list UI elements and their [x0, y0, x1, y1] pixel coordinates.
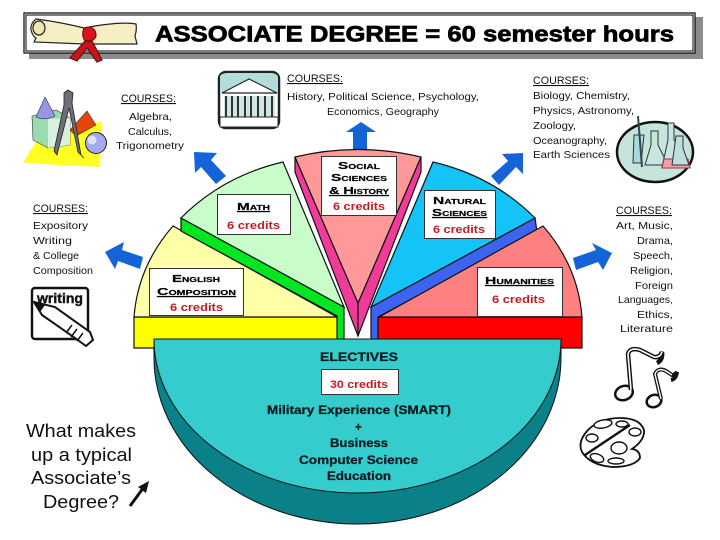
- courses text: math: [116, 93, 185, 152]
- courses text: math: Algebra,: [129, 111, 172, 123]
- question text: Degree?: [43, 491, 119, 512]
- courses text: humanities: Art, Music,: [616, 220, 673, 232]
- icon: writing pencil: writing: [36, 290, 83, 306]
- courses text: social sciences and history: History, Political Science, Psychology,: [287, 91, 479, 103]
- panel: electives half disc: [154, 339, 561, 524]
- panel: natural sciences wedge: [371, 162, 537, 340]
- courses text: natural sciences: Earth Sciences: [533, 149, 610, 161]
- courses text: natural sciences: [533, 75, 634, 161]
- title text: ASSOCIATE DEGREE = 60 semester hours: [155, 22, 674, 46]
- title banner: [24, 13, 703, 59]
- courses text: english composition: Writing: [33, 235, 72, 247]
- arrow: small black pointer: [130, 481, 149, 506]
- courses text: humanities: Ethics,: [637, 309, 673, 321]
- courses text: math: Calculus,: [128, 126, 172, 138]
- panel: english composition label: English: [172, 273, 220, 285]
- panel: natural sciences label: 6 credits: [433, 224, 485, 236]
- arrow: to natural science courses: [491, 153, 523, 185]
- courses text: humanities: Drama,: [637, 235, 673, 247]
- arrow: to humanities courses: [573, 243, 612, 270]
- courses text: humanities: Speech,: [633, 250, 673, 262]
- panel: social sciences label: [322, 156, 396, 216]
- panel: social sciences label: & History: [329, 185, 389, 197]
- electives course list: Computer Science: [299, 455, 418, 467]
- panel: social sciences label: Sciences: [331, 172, 387, 184]
- courses text: natural sciences: Oceanography,: [533, 135, 607, 147]
- courses text: humanities: Literature: [620, 323, 673, 335]
- electives course list: Education: [327, 471, 391, 483]
- courses text: humanities: COURSES:: [616, 205, 672, 217]
- panel: math label: Math: [237, 201, 270, 213]
- arrow: to social science courses: [346, 122, 376, 150]
- arrow: to math courses: [194, 152, 226, 184]
- icon: science flasks: [617, 116, 693, 182]
- question text: Associate’s: [31, 467, 131, 488]
- courses text: natural sciences: Physics, Astronomy,: [533, 105, 634, 117]
- icon: geometry shapes and compass: [23, 90, 106, 167]
- panel: social sciences label: 6 credits: [333, 201, 385, 213]
- courses text: social sciences and history: [287, 73, 479, 118]
- panel: math wedge: [181, 162, 344, 340]
- courses text: humanities: [616, 205, 673, 335]
- courses text: natural sciences: COURSES:: [533, 75, 589, 87]
- courses text: humanities: Foreign: [635, 280, 673, 292]
- electives credits box: [322, 370, 398, 394]
- panel: math label: [218, 194, 290, 234]
- arrow: to english courses: [105, 242, 143, 269]
- courses text: english composition: Expository: [33, 220, 89, 232]
- panel: natural sciences label: [424, 190, 496, 238]
- icon: paint palette: [580, 418, 644, 467]
- question text: up a typical: [31, 444, 132, 465]
- courses text: social sciences and history: Economics, Geography: [327, 106, 440, 118]
- courses text: english composition: [33, 203, 93, 277]
- electives course list: +: [355, 422, 362, 434]
- panel: humanities label: Humanities: [485, 275, 554, 287]
- courses text: english composition: & College: [33, 250, 79, 262]
- electives credits box: 30 credits: [330, 379, 388, 391]
- panel: math label: 6 credits: [227, 220, 280, 232]
- panel: english composition label: 6 credits: [170, 302, 223, 314]
- courses text: natural sciences: Zoology,: [533, 120, 576, 132]
- panel: english composition wedge: [134, 226, 338, 348]
- electives course list: Military Experience (SMART): [267, 405, 451, 417]
- courses text: humanities: Languages,: [618, 294, 673, 306]
- courses text: math: COURSES:: [121, 93, 176, 105]
- icon: classical temple: [219, 72, 279, 128]
- question text: [26, 420, 136, 512]
- courses text: english composition: Composition: [33, 265, 93, 277]
- icon: music notes: [613, 349, 677, 409]
- electives heading: ELECTIVES: [320, 352, 398, 364]
- panel: english composition label: [150, 268, 244, 316]
- panel: social sciences wedge: [295, 150, 421, 336]
- panel: humanities label: 6 credits: [492, 294, 545, 306]
- electives course list: Business: [330, 438, 388, 450]
- panel: humanities label: [478, 268, 562, 316]
- courses text: natural sciences: Biology, Chemistry,: [533, 90, 630, 102]
- panel: humanities wedge: [378, 226, 582, 348]
- electives course list: [267, 405, 451, 483]
- icon: writing pencil: [32, 288, 93, 346]
- question text: What makes: [26, 420, 136, 441]
- panel: social sciences label: Social: [338, 160, 381, 172]
- panel: natural sciences label: Natural: [433, 195, 487, 207]
- panel: natural sciences label: Sciences: [432, 207, 487, 219]
- courses text: humanities: Religion,: [630, 265, 673, 277]
- courses text: social sciences and history: COURSES:: [287, 73, 343, 85]
- icon: diploma scroll: [31, 19, 137, 62]
- courses text: math: Trigonometry: [116, 140, 185, 152]
- courses text: english composition: COURSES:: [33, 203, 88, 215]
- panel: english composition label: Composition: [157, 286, 236, 298]
